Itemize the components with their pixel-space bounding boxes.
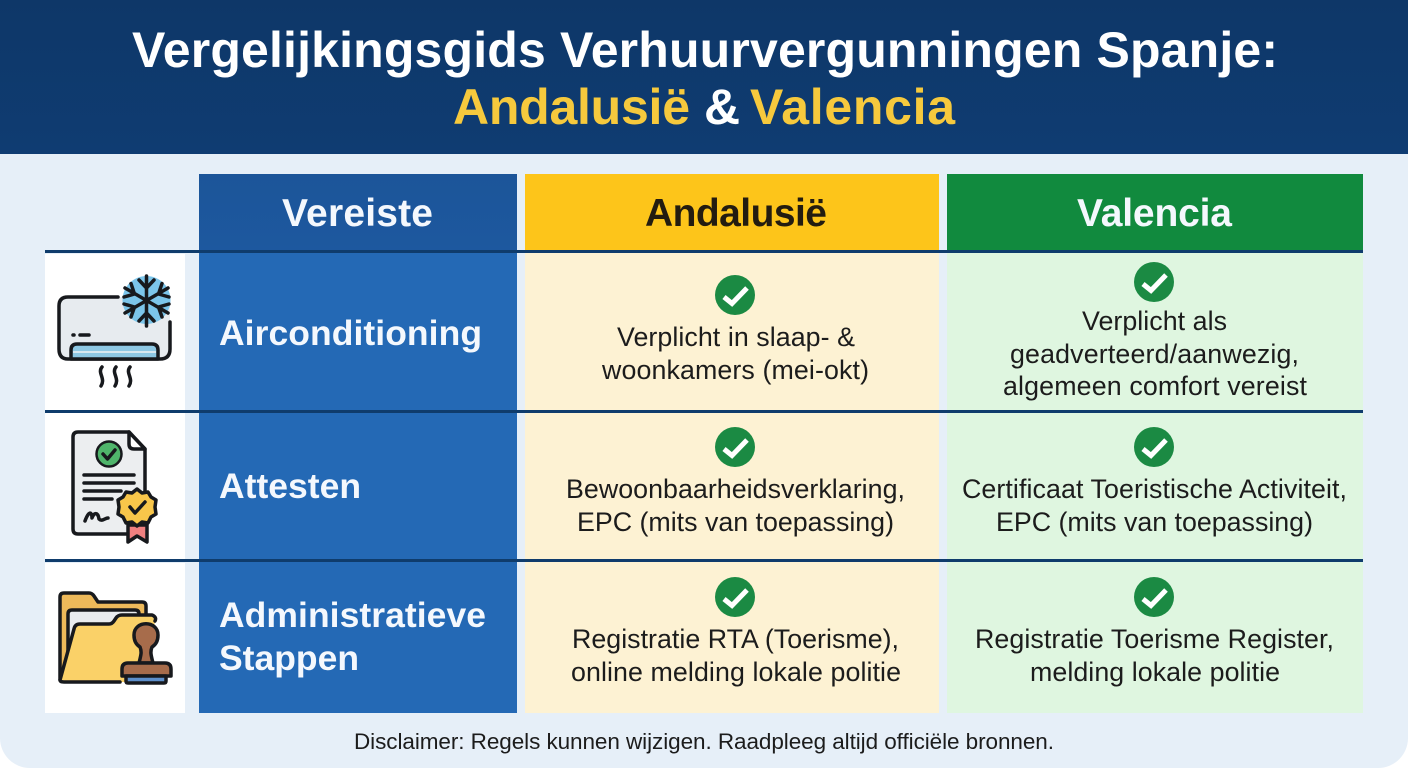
icon: air conditioner with snowflake: [59, 276, 170, 386]
Andalusië cell: Registratie RTA (Toerisme),: [572, 624, 899, 654]
Valencia cell: Registratie Toerisme Register,: [975, 624, 1334, 654]
header: Valencia: [947, 174, 1363, 251]
header: Andalusië: [525, 174, 939, 251]
title banner: [0, 0, 1408, 154]
row 3: Administratieve Stappen: [60, 577, 1334, 687]
label: Airconditioning: Airconditioning: [219, 313, 482, 353]
Andalusië cell: online melding lokale politie: [571, 657, 901, 687]
label: Administratieve Stappen: Administratieve: [219, 595, 486, 635]
header: Vereiste: Vereiste: [282, 192, 433, 235]
label: Administratieve Stappen: [219, 595, 486, 678]
Andalusië cell: [601, 275, 869, 385]
title line 2: [453, 79, 956, 135]
Valencia cell: melding lokale politie: [1030, 657, 1280, 687]
header: Vereiste: [199, 174, 517, 251]
Andalusië cell: Bewoonbaarheidsverklaring,: [566, 474, 905, 504]
disclaimer: Disclaimer: Regels kunnen wijzigen. Raadpleeg altijd officiële bronnen.: [354, 729, 1054, 754]
Valencia cell: [975, 577, 1334, 687]
row 1: Airconditioning: [59, 262, 1308, 401]
header: Andalusië: Andalusië: [645, 192, 827, 235]
icon: certificate with seal: [73, 432, 156, 542]
Andalusië cell: [566, 427, 905, 537]
icon: folder with stamp: [60, 593, 171, 683]
column: Andalusië background: [525, 253, 939, 713]
Valencia cell: geadverteerd/aanwezig,: [1010, 339, 1299, 369]
icon cell backgrounds: [45, 254, 185, 713]
title line 2: Andalusië: [453, 79, 690, 135]
Andalusië cell: Verplicht in slaap- &: [617, 322, 855, 352]
label: Administratieve Stappen: Stappen: [219, 638, 359, 678]
Valencia cell: Certificaat Toeristische Activiteit,: [962, 474, 1347, 504]
row 2: Attesten: [73, 427, 1347, 542]
Valencia cell: [962, 427, 1347, 537]
Andalusië cell: [571, 577, 901, 687]
Valencia cell: EPC (mits van toepassing): [996, 507, 1313, 537]
column: Valencia background: [947, 253, 1363, 713]
title line 2: &: [704, 79, 740, 135]
label: Attesten: Attesten: [219, 466, 361, 506]
title line 1: Vergelijkingsgids Verhuurvergunningen Spanje:: [132, 22, 1278, 78]
header: Valencia: Valencia: [1077, 192, 1232, 235]
Andalusië cell: woonkamers (mei-okt): [601, 355, 869, 385]
Valencia cell: Verplicht als: [1082, 306, 1227, 336]
Valencia cell: algemeen comfort vereist: [1003, 371, 1308, 401]
Andalusië cell: EPC (mits van toepassing): [577, 507, 894, 537]
title line 2: Valencia: [750, 79, 956, 135]
Valencia cell: [1003, 262, 1308, 401]
column: Vereiste background: [199, 253, 517, 713]
